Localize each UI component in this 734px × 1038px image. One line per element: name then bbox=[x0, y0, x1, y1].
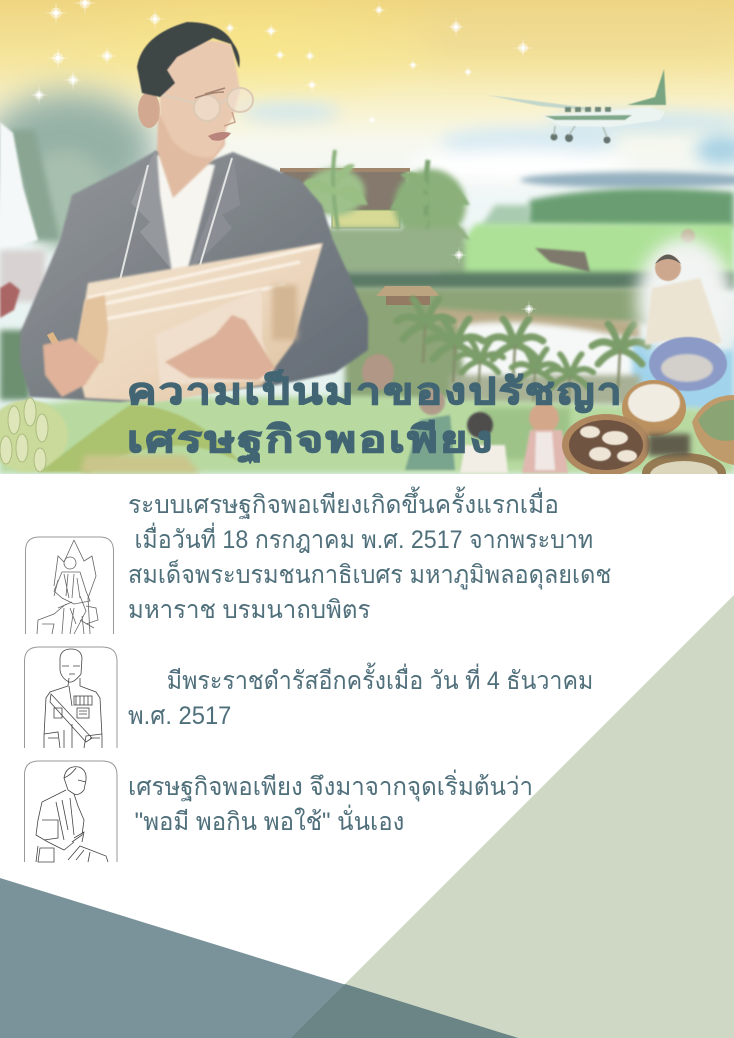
vegetation around pond bbox=[345, 305, 640, 405]
text block: third paragraph: เศรษฐกิจพอเพียง จึงมาจากจุดเริ่มต้นว่า bbox=[128, 773, 533, 801]
icon: uniform portrait line drawing bbox=[24, 646, 118, 748]
text block: first paragraph: มหาราช บรมนาถบพิตร bbox=[128, 596, 370, 624]
children bbox=[362, 354, 568, 473]
baskets of food bbox=[562, 380, 734, 493]
title: ความเป็นมาของปรัชญา bbox=[127, 370, 624, 413]
hero photo collage bbox=[0, 0, 734, 474]
icon: seated portrait line drawing bbox=[25, 536, 114, 634]
man: shirt bbox=[157, 155, 215, 272]
clouds bbox=[240, 102, 734, 181]
palms bbox=[397, 299, 648, 408]
rice field bbox=[440, 224, 734, 285]
man: jacket bbox=[20, 150, 368, 402]
sky bbox=[0, 0, 734, 474]
man: neck and head bbox=[137, 22, 253, 198]
pond bbox=[460, 300, 734, 410]
man: newspaper bbox=[73, 243, 323, 402]
text block: first paragraph: ระบบเศรษฐกิจพอเพียงเกิดขึ้นครั้งแรกเมื่อ bbox=[128, 491, 559, 519]
text block: third paragraph: "พอมี พอกิน พอใช้" นั่นเอง bbox=[135, 808, 404, 836]
lower green field bbox=[0, 396, 734, 473]
rice and bananas bbox=[0, 398, 240, 473]
text block: second paragraph: มีพระราชดำรัสอีกครั้งเมื่อ วัน ที่ 4 ธันวาคม bbox=[167, 667, 593, 695]
left hillside and waterfall bbox=[0, 92, 155, 400]
tree line and farmland bbox=[340, 272, 734, 340]
title bbox=[127, 369, 624, 464]
text block: second paragraph: พ.ศ. 2517 bbox=[128, 702, 231, 730]
white wash over collage bbox=[0, 0, 734, 474]
icon: man with newspaper line drawing bbox=[24, 760, 118, 862]
airplane bbox=[487, 69, 666, 144]
text block: third paragraph bbox=[128, 770, 533, 836]
title: เศรษฐกิจพอเพียง bbox=[127, 418, 495, 461]
text block: second paragraph bbox=[128, 662, 593, 730]
woman with basket bbox=[637, 238, 733, 391]
sparkles bbox=[29, 0, 538, 318]
mountains and forest bbox=[480, 172, 734, 228]
man: hands and pencil bbox=[43, 315, 275, 397]
text block: first paragraph: สมเด็จพระบรมชนกาธิเบศร มหาภูมิพลอดุลยเดช bbox=[128, 561, 611, 589]
text block: first paragraph bbox=[128, 486, 611, 624]
text block: first paragraph: เมื่อวันที่ 18 กรกฎาคม พ.ศ. 2517 จากพระบาท bbox=[134, 526, 593, 554]
banana trees and hut bbox=[280, 150, 470, 274]
